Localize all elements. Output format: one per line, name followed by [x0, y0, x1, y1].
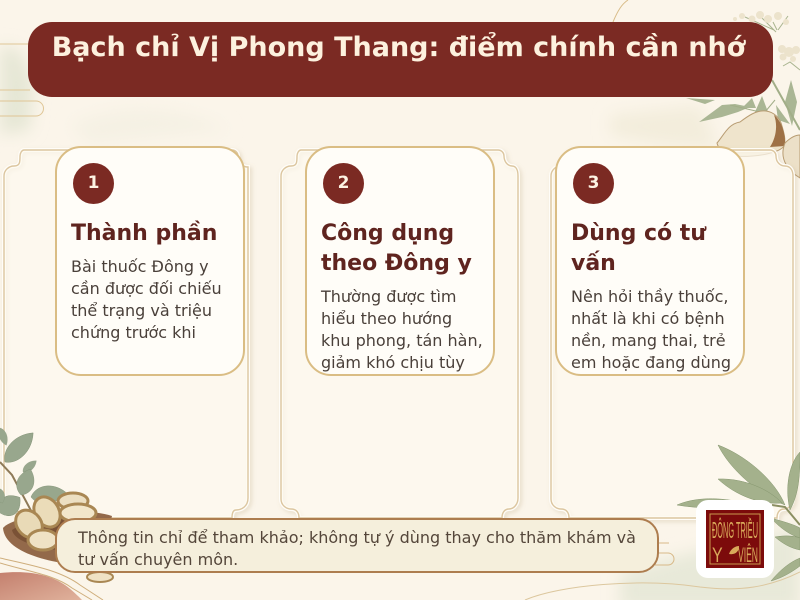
text: dùng có tư vấn: Nên hỏi thầy thuốc, [571, 287, 728, 306]
title banner [28, 22, 773, 97]
disclaimer text: Thông tin chỉ để tham khảo; không tự ý dùng thay cho thăm khám và [78, 528, 636, 547]
title text: Bạch chỉ Vị Phong Thang: điểm chính cần nhớ [52, 32, 745, 63]
disclaimer callout [55, 518, 659, 573]
number badge 3: 3 [588, 173, 599, 193]
panel: thành phần [55, 146, 245, 376]
heading: công dụng: Công dụng [321, 221, 454, 246]
text: công dụng: Thường được tìm [321, 287, 456, 306]
wash [0, 45, 34, 135]
panel: công dụng [305, 146, 495, 376]
text: dùng có tư vấn: nền, mang thai, trẻ [571, 331, 726, 350]
text: dùng có tư vấn [571, 287, 731, 372]
text: thành phần [71, 257, 222, 342]
heading: dùng có tư vấn [571, 221, 706, 276]
text: công dụng: hiểu theo hướng [321, 309, 452, 328]
frames [4, 150, 793, 518]
number badge 1: 1 [88, 173, 99, 193]
text: dùng có tư vấn: em hoặc đang dùng [571, 353, 731, 372]
text: thành phần: cần được đối chiếu [71, 279, 222, 298]
logo mark: Y [712, 543, 723, 566]
angelica root slices [717, 111, 785, 156]
heading: công dụng: theo Đông y [321, 251, 472, 276]
text: công dụng: khu phong, tán hàn, [321, 331, 483, 350]
number badge 1 [73, 163, 114, 204]
heading: dùng có tư vấn: Dùng có tư [571, 221, 706, 246]
leaves bottom right [677, 445, 800, 581]
panel: dùng có tư vấn [555, 146, 745, 376]
heading: dùng có tư vấn: vấn [571, 251, 616, 276]
text: thành phần: thể trạng và triệu [71, 301, 212, 320]
text: thành phần: chứng trước khi [71, 323, 196, 342]
number badge 2: 2 [338, 173, 349, 193]
eucalyptus sprig left [0, 462, 36, 520]
heading: công dụng [321, 221, 472, 276]
number badge 3 [573, 163, 614, 204]
text: công dụng [320, 287, 483, 372]
flowers top right [745, 16, 800, 70]
thin lines [613, 0, 628, 22]
logo mark [706, 510, 764, 568]
number badge 2 [323, 163, 364, 204]
text: thành phần: Bài thuốc Đông y [71, 257, 209, 276]
fern leaves [686, 80, 797, 126]
disclaimer text: tư vấn chuyên môn. [78, 550, 238, 569]
heading: thành phần: Thành phần [71, 221, 217, 246]
logo mark: VIÊN [738, 543, 758, 567]
bowl with root slices [3, 511, 112, 566]
logo badge [696, 500, 774, 578]
rose corner [0, 572, 82, 600]
disclaimer text [78, 528, 636, 569]
text: dùng có tư vấn: nhất là khi có bệnh [571, 309, 725, 328]
text: công dụng: giảm khó chịu tùy [321, 353, 465, 372]
